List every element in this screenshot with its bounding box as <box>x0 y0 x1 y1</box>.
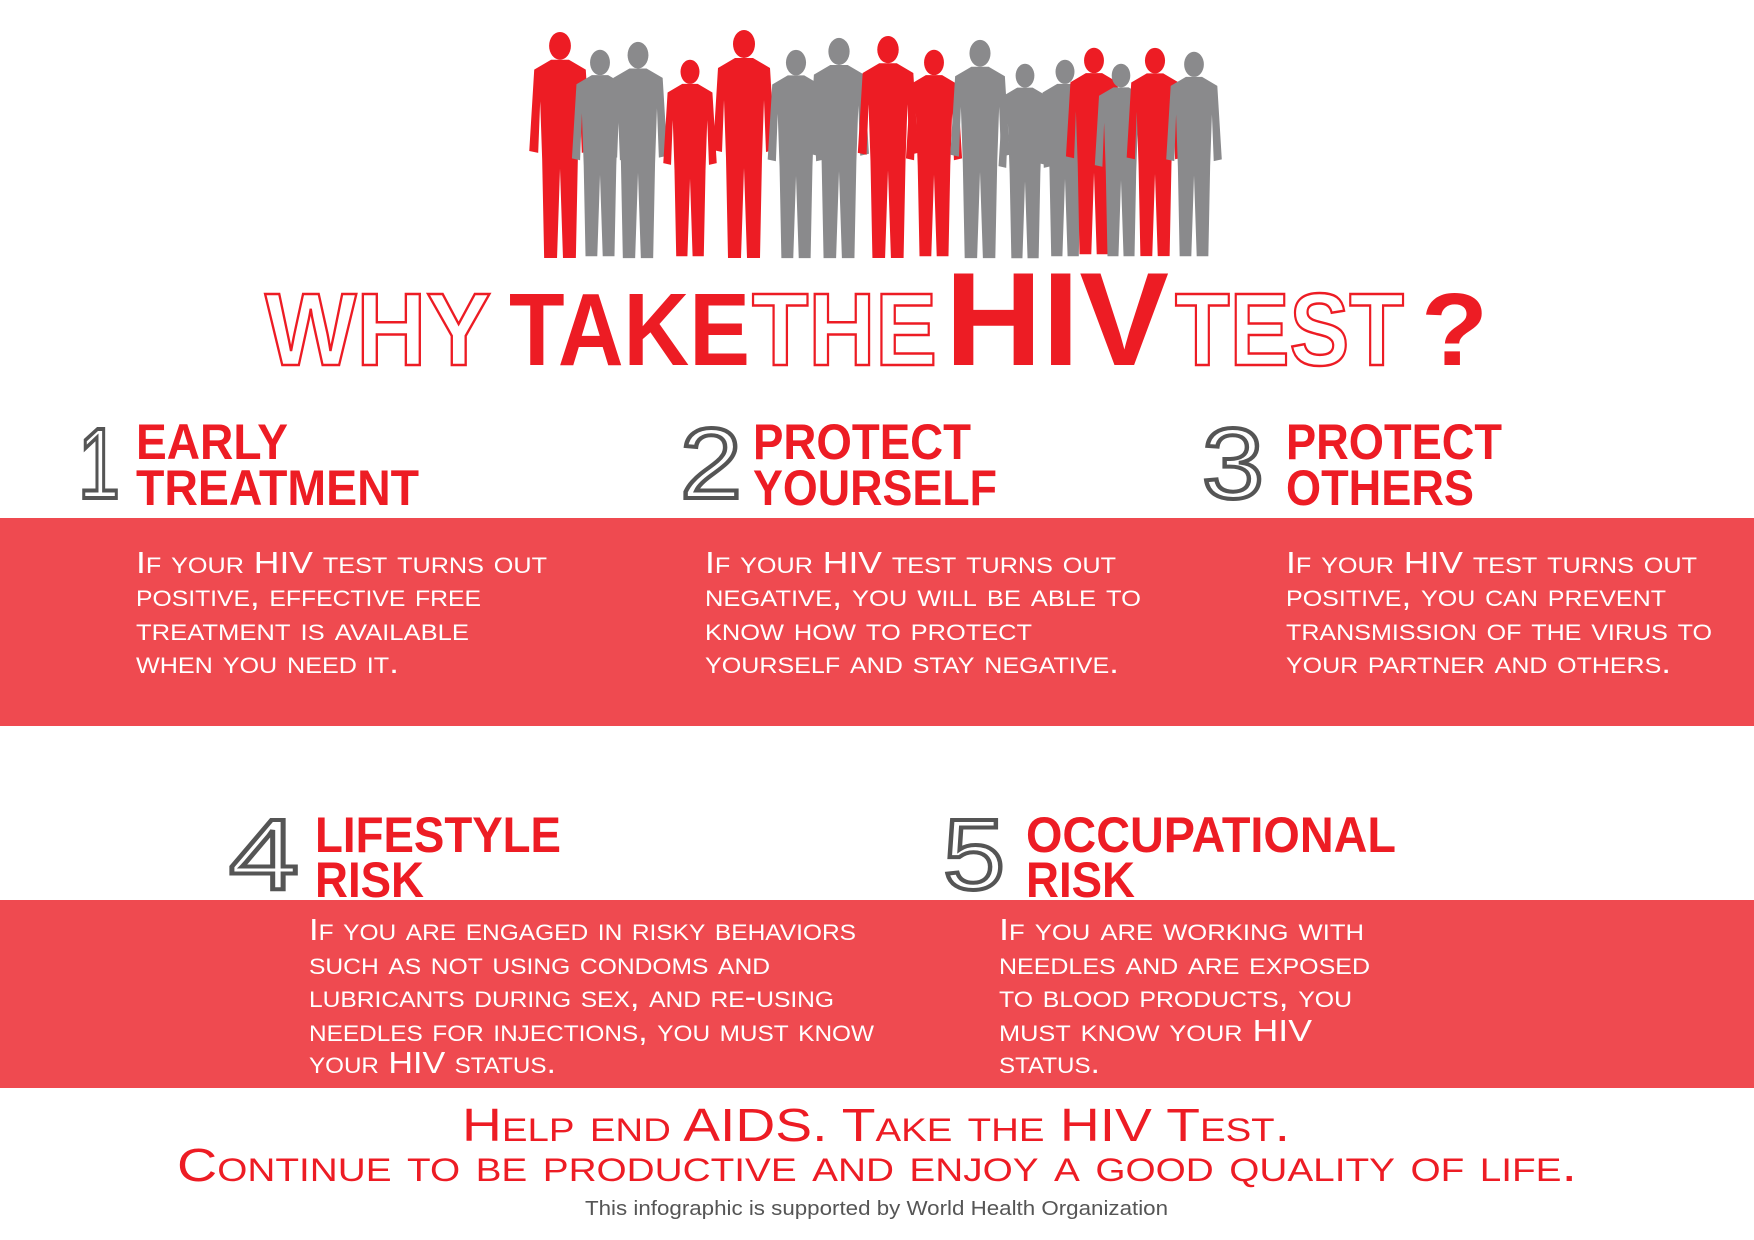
item 4: lifestyle risk: needles for injections, you must know <box>309 1013 874 1048</box>
item 5: occupational risk: to blood products, you <box>999 979 1352 1014</box>
item 5: occupational risk: must know your HIV <box>999 1013 1312 1048</box>
footer slogan: Continue to be productive and enjoy a good quality of life. <box>177 1139 1577 1191</box>
item 5: occupational risk: needles and are exposed <box>999 946 1370 981</box>
item 3: protect others <box>1202 408 1712 680</box>
item 2: protect yourself: know how to protect <box>705 612 1032 647</box>
item 4: lifestyle risk: 4 <box>229 799 299 911</box>
item 3: protect others: positive, you can prevent <box>1286 578 1666 613</box>
item 2: protect yourself: negative, you will be able to <box>705 578 1141 613</box>
item 4: lifestyle risk <box>229 799 874 1080</box>
item 1: early treatment: treatment is available <box>136 612 469 647</box>
item 2: protect yourself: If your HIV test turns out <box>705 545 1116 580</box>
item 1: early treatment: If your HIV test turns out <box>136 545 547 580</box>
credit: This infographic is supported by World Health Organization <box>585 1198 1168 1220</box>
item 2: protect yourself: PROTECT <box>753 414 971 470</box>
item 1: early treatment: positive, effective free <box>136 578 481 613</box>
footer slogan <box>177 1099 1577 1191</box>
band 2 <box>0 900 1754 1088</box>
item 4: lifestyle risk: LIFESTYLE <box>315 807 561 863</box>
item 3: protect others: transmission of the virus to <box>1286 612 1712 647</box>
title <box>265 246 1488 394</box>
item 5: occupational risk: status. <box>999 1045 1100 1080</box>
item 4: lifestyle risk: such as not using condoms and <box>309 946 770 981</box>
item 4: lifestyle risk: lubricants during sex, and re-using <box>309 979 834 1014</box>
item 1: early treatment: 1 <box>78 408 120 520</box>
item 2: protect yourself: yourself and stay negative. <box>705 645 1119 680</box>
title: ? <box>1421 272 1488 387</box>
item 1: early treatment <box>78 408 547 680</box>
item 4: lifestyle risk: If you are engaged in risky behaviors <box>309 912 856 947</box>
item 2: protect yourself <box>680 408 1141 680</box>
title: TEST <box>1175 272 1404 387</box>
item 4: lifestyle risk: RISK <box>315 852 424 908</box>
item 5: occupational risk: 5 <box>943 799 1005 911</box>
title: WHY <box>265 272 491 387</box>
title: HIV <box>945 246 1169 394</box>
item 3: protect others: If your HIV test turns out <box>1286 545 1697 580</box>
title: TAKE <box>509 272 750 387</box>
item 5: occupational risk: RISK <box>1026 852 1135 908</box>
footer slogan: Help end AIDS. Take the HIV Test. <box>462 1099 1290 1151</box>
title: THE <box>752 272 937 387</box>
item 3: protect others: 3 <box>1202 408 1264 520</box>
item 3: protect others: OTHERS <box>1286 460 1474 516</box>
band 1 <box>0 518 1754 726</box>
item 2: protect yourself: YOURSELF <box>753 460 997 516</box>
item 5: occupational risk <box>943 799 1396 1080</box>
item 1: early treatment: EARLY <box>136 414 288 470</box>
item 5: occupational risk: If you are working with <box>999 912 1364 947</box>
item 1: early treatment: when you need it. <box>136 645 399 680</box>
item 5: occupational risk: OCCUPATIONAL <box>1026 807 1396 863</box>
item 2: protect yourself: 2 <box>680 408 742 520</box>
illustration: crowd of people silhouettes <box>529 30 1222 258</box>
item 1: early treatment: TREATMENT <box>136 460 419 516</box>
item 3: protect others: PROTECT <box>1286 414 1502 470</box>
item 3: protect others: your partner and others. <box>1286 645 1671 680</box>
item 4: lifestyle risk: your HIV status. <box>309 1045 556 1080</box>
